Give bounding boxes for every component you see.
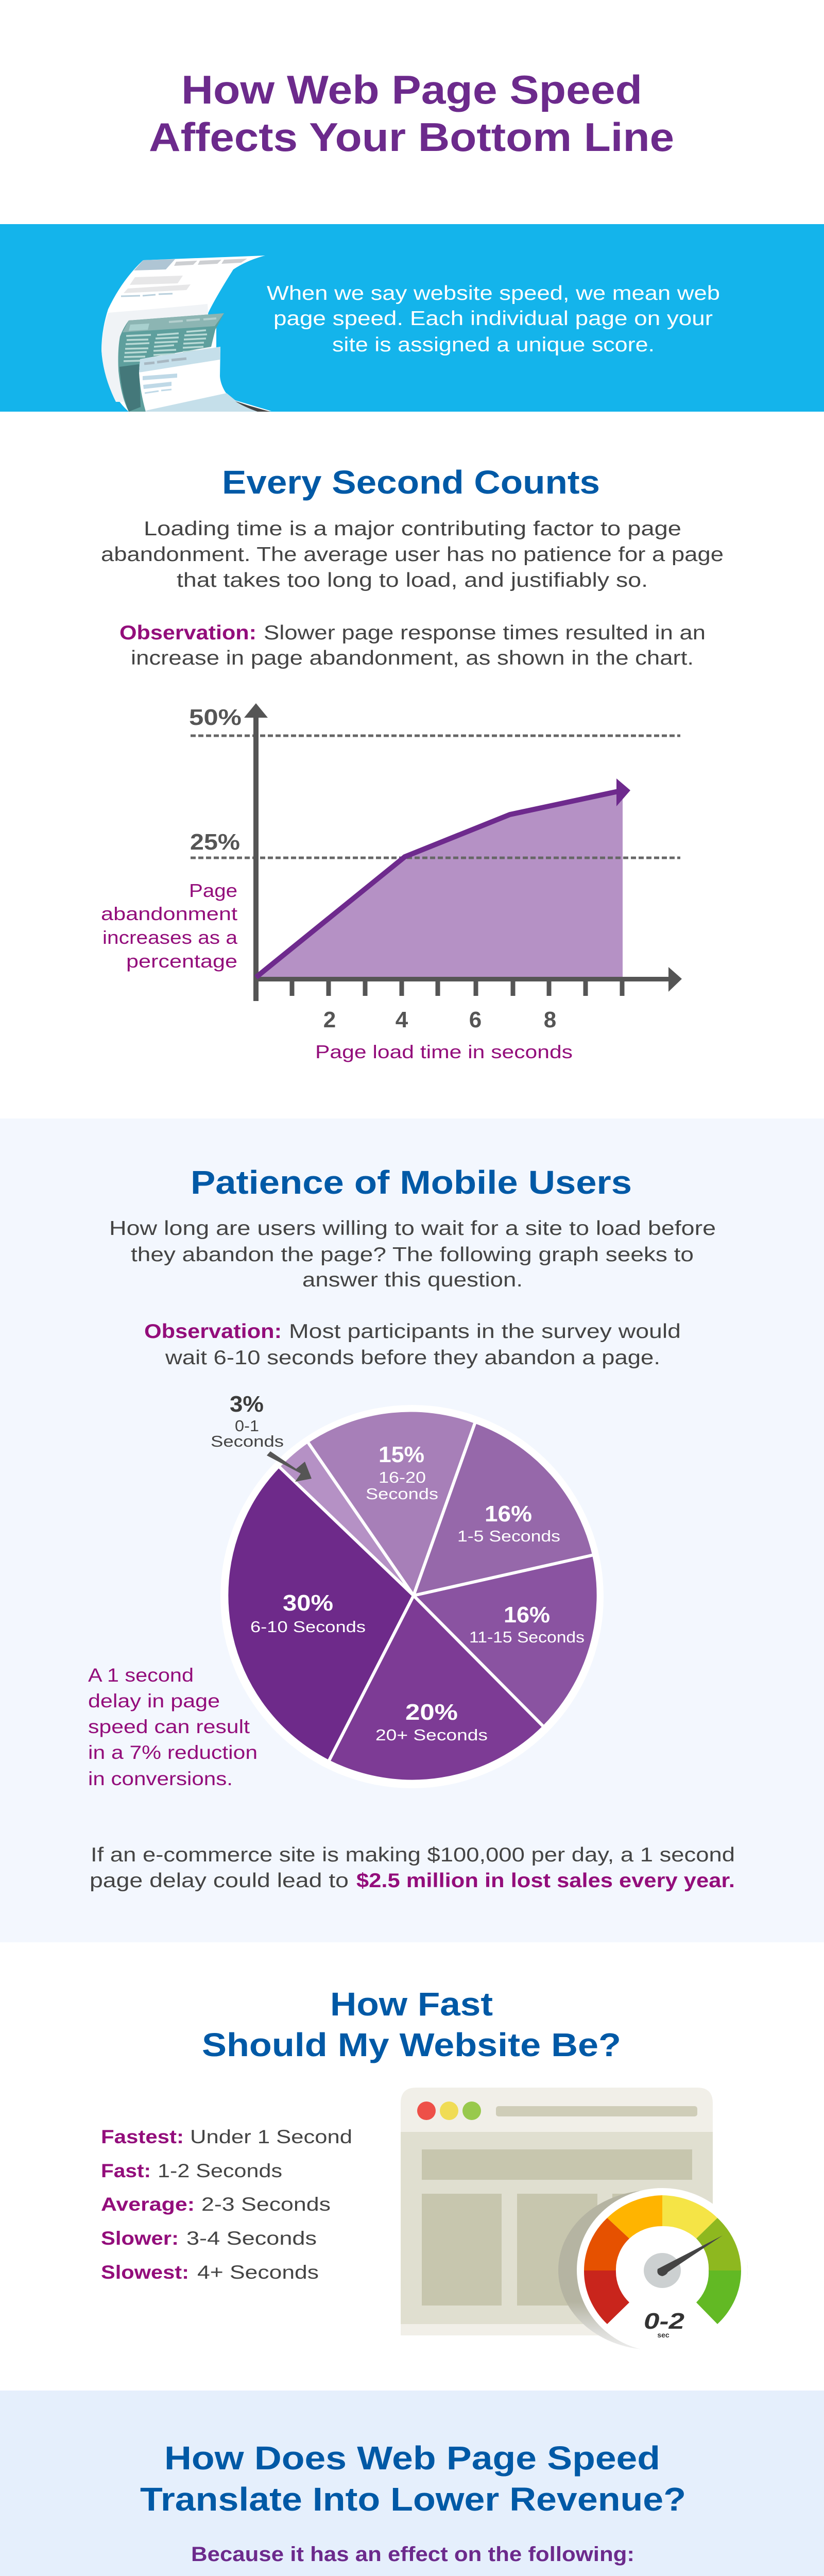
intro text: site is assigned a unique score. (332, 334, 655, 356)
title (149, 67, 674, 160)
axis labels: 4 (396, 1007, 408, 1032)
text block: observation (144, 1320, 681, 1369)
pie label: 16% 1-5 (457, 1501, 560, 1545)
text block: loading time: abandonment. The average user has no patience for a page (101, 544, 724, 566)
heading: How Fast (330, 1986, 493, 2023)
heading (202, 1986, 621, 2063)
speed list: 4+ Seconds (197, 2262, 319, 2283)
y axis caption: Page (189, 880, 237, 901)
gauge readout: sec (657, 2331, 670, 2339)
title: How Web Page Speed (181, 67, 642, 112)
text block: question (109, 1217, 716, 1291)
text block: question: they abandon the page? The following graph seeks to (131, 1244, 694, 1266)
intro text: When we say website speed, we mean web (267, 282, 720, 304)
icon: browser window (401, 2088, 713, 2335)
heading: Should My Website Be? (202, 2026, 621, 2063)
icon: speed gauge (558, 2188, 748, 2352)
pie label: 15%: Seconds (366, 1485, 438, 1503)
trend line (256, 778, 630, 977)
y axis caption: percentage (126, 951, 237, 972)
text block: loading time: that takes too long to load, and justifiably so. (177, 569, 648, 591)
pie label: 16% 11-15: 11-15 Seconds (469, 1628, 585, 1646)
callout: conversions: delay in page (88, 1690, 220, 1711)
speed list: 1-2 Seconds (158, 2160, 282, 2181)
panel: intro band (0, 224, 824, 412)
arrow: 3% pointer (267, 1451, 312, 1482)
pie label: 30%: 30% (283, 1590, 333, 1616)
text block: observation: Most participants in the survey would (289, 1320, 681, 1343)
y axis caption: increases as a (102, 927, 238, 948)
slice: 16% 1-5 seconds (414, 1422, 594, 1596)
callout: conversions: speed can result (88, 1716, 250, 1737)
heading: Every Second Counts (222, 464, 600, 501)
slice: 20% 20+ seconds (329, 1596, 544, 1782)
y axis caption: abandonment (101, 903, 237, 924)
pie label: 20%: 20+ Seconds (375, 1726, 488, 1744)
speed list: Fast: (101, 2160, 151, 2181)
pie label: 16% 1-5: 1-5 Seconds (457, 1527, 560, 1545)
speed list: Under 1 Second (190, 2126, 352, 2147)
area chart: page abandonment (101, 703, 682, 1062)
heading (140, 2439, 686, 2518)
pie label: 30%: 6-10 Seconds (250, 1618, 366, 1636)
callout: conversions: in conversions. (88, 1768, 233, 1789)
text block: question: How long are users willing to wait for a site to load before (109, 1217, 716, 1240)
axis labels: 2 (323, 1007, 336, 1032)
pie label: 16% 11-15: 16% (504, 1602, 550, 1628)
panel: every second counts (101, 464, 724, 1062)
pie label: 3%: 3% (230, 1392, 264, 1417)
text block: observation (119, 622, 706, 669)
subheading: Because it has an effect on the following: (191, 2543, 634, 2566)
pie label: 3% (211, 1392, 284, 1450)
title: Affects Your Bottom Line (149, 114, 674, 160)
gauge readout: 0-2 (644, 2309, 685, 2334)
pie chart (211, 1392, 604, 1788)
gauge readout (644, 2309, 685, 2339)
intro text: page speed. Each individual page on your (273, 308, 713, 330)
text block: observation: Observation: (144, 1320, 282, 1343)
text block: lost sales: $2.5 million in lost sales every year. (356, 1870, 735, 1892)
intro text (267, 282, 720, 356)
icon: curling web pages (101, 256, 271, 412)
panel: patience of mobile users (0, 1118, 824, 1942)
slice: 15% 16-20 seconds (307, 1410, 475, 1596)
panel: how fast should my website be (101, 1986, 748, 2352)
text block: observation: Slower page response times resulted in an (264, 622, 706, 644)
heading: Patience of Mobile Users (191, 1164, 632, 1201)
x axis (253, 967, 682, 996)
text block: observation: increase in page abandonment, as shown in the chart. (131, 647, 694, 669)
text block: observation: Observation: (119, 622, 256, 644)
text block: observation: wait 6-10 seconds before they abandon a page. (165, 1347, 660, 1369)
heading: Translate Into Lower Revenue? (140, 2481, 686, 2518)
pie label: 16% 1-5: 16% (485, 1501, 532, 1527)
axis labels (189, 705, 573, 1062)
speed list (101, 2126, 352, 2283)
speed list: Slower: (101, 2228, 179, 2249)
text block: loading time (101, 518, 724, 591)
slice: 3% 0-1 seconds (279, 1442, 414, 1596)
slice: 16% 11-15 seconds (414, 1555, 598, 1727)
pie label: 15%: 15% (379, 1442, 424, 1467)
pie label: 3%: Seconds (211, 1432, 284, 1450)
text block: lost sales (90, 1844, 735, 1892)
callout: conversions: A 1 second (88, 1665, 194, 1686)
heading: How Does Web Page Speed (164, 2439, 660, 2477)
speed list: 2-3 Seconds (201, 2194, 331, 2215)
speed list: Slowest: (101, 2262, 189, 2283)
callout: conversions: in a 7% reduction (88, 1742, 258, 1763)
area fill (256, 791, 623, 977)
pie label: 20% (375, 1700, 488, 1744)
panel: lower revenue (0, 2391, 824, 2576)
axis labels: 50% (189, 705, 242, 730)
y axis caption (101, 880, 238, 972)
speed list: Fastest: (101, 2126, 184, 2147)
text block: loading time: Loading time is a major contributing factor to page (144, 518, 681, 540)
text block: question: answer this question. (302, 1269, 523, 1291)
speed list: Average: (101, 2194, 195, 2215)
axis labels: 8 (544, 1007, 556, 1032)
text block: lost sales: page delay could lead to (90, 1870, 349, 1892)
pie label: 3%: 0-1 (235, 1417, 259, 1435)
text block: lost sales: If an e-commerce site is making $100,000 per day, a 1 second (91, 1844, 735, 1866)
axis labels: 6 (469, 1007, 482, 1032)
axis labels: Page load time in seconds (315, 1041, 573, 1062)
pie label: 16% 11-15 (469, 1602, 585, 1646)
y axis (244, 703, 268, 1001)
pie label: 30% (250, 1590, 366, 1636)
speed list: 3-4 Seconds (186, 2228, 317, 2249)
pie label: 20%: 20% (405, 1700, 458, 1725)
axis labels: 25% (190, 829, 240, 855)
callout: conversions (88, 1665, 258, 1789)
pie label: 15%: 16-20 (379, 1468, 426, 1486)
pie label: 15% (366, 1442, 438, 1503)
slice: 30% 6-10 seconds (227, 1466, 414, 1761)
